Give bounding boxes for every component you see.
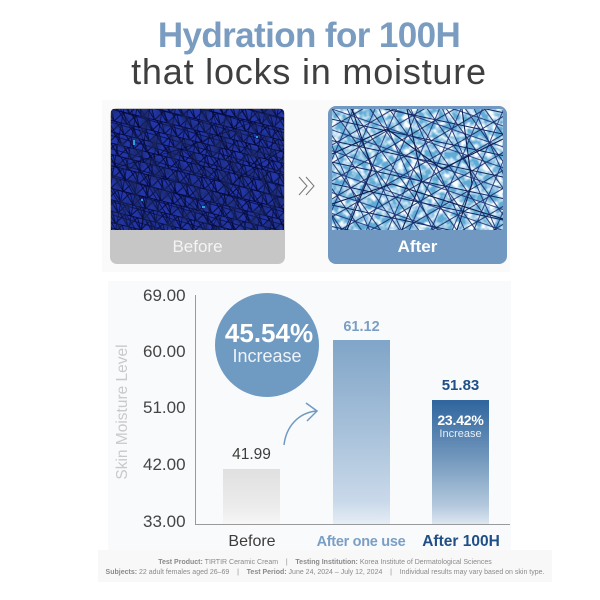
title: that locks in moisture bbox=[131, 51, 487, 92]
image: skin after bbox=[332, 109, 503, 230]
bar callout: 23.42% increase bbox=[437, 412, 484, 440]
bar callout: 23.42% increase: Increase bbox=[439, 428, 482, 440]
footnote bbox=[98, 550, 552, 582]
card: after bbox=[328, 106, 507, 264]
label: before: Before bbox=[172, 237, 223, 256]
panel: bar chart bbox=[108, 281, 511, 550]
callout circle: 45.54% increase: Increase bbox=[232, 346, 302, 366]
bar: after 100H bbox=[432, 400, 489, 524]
baseline axis bbox=[195, 524, 510, 525]
card: before bbox=[110, 108, 285, 264]
bar: before bbox=[223, 469, 280, 524]
value: after 100H: 51.83 bbox=[442, 377, 479, 394]
image: skin before bbox=[111, 109, 284, 230]
callout circle: 45.54% increase bbox=[215, 293, 319, 397]
bar callout: 23.42% increase: 23.42% bbox=[437, 412, 484, 428]
value: before: 41.99 bbox=[232, 446, 271, 463]
y axis labels bbox=[143, 286, 186, 531]
y axis labels: 33.00 bbox=[143, 512, 186, 531]
y axis labels: 42.00 bbox=[143, 455, 186, 474]
bar: after one use bbox=[333, 340, 390, 524]
category label: before: Before bbox=[228, 533, 276, 550]
footnote: Test Product: TIRTIR Ceramic Cream | Testing Institution: Korea Institute of Dermatological Sciences bbox=[158, 559, 492, 566]
y axis labels: 60.00 bbox=[143, 342, 186, 361]
y axis labels: 69.00 bbox=[143, 286, 186, 305]
title bbox=[131, 16, 487, 92]
arrow: growth bbox=[283, 402, 318, 446]
panel: before and after comparison bbox=[102, 100, 510, 272]
value: after one use: 61.12 bbox=[343, 319, 380, 335]
callout circle: 45.54% increase: 45.54% bbox=[225, 318, 313, 348]
y axis title: Skin Moisture Level bbox=[114, 344, 131, 480]
label: after: After bbox=[398, 237, 437, 256]
category label: after one use: After one use bbox=[317, 534, 405, 550]
category label: after 100H: After 100H bbox=[422, 533, 500, 550]
title: Hydration for 100H bbox=[158, 16, 460, 55]
y axis labels: 51.00 bbox=[143, 398, 186, 417]
footnote: Subjects: 22 adult females aged 26–69 | Test Period: June 24, 2024 – July 12, 2024 | Individual results may vary based on skin type. bbox=[106, 569, 544, 576]
icon: double chevron arrow bbox=[298, 176, 314, 196]
vertical axis bbox=[195, 295, 196, 525]
